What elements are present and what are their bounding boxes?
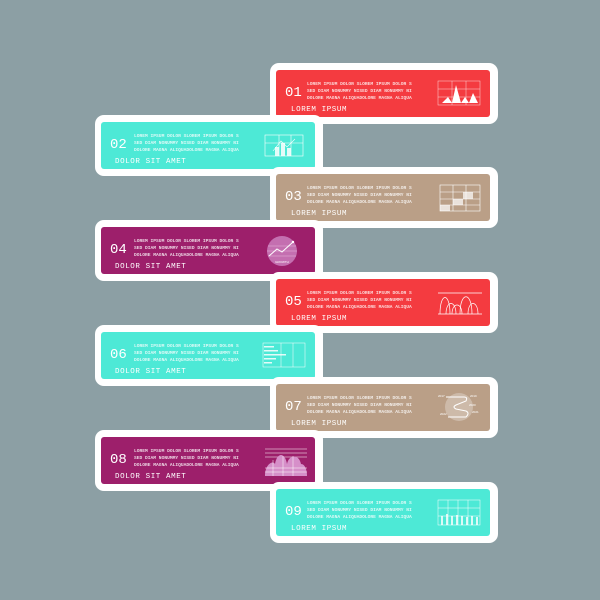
text block 06: DOLORE MAGNA ALIQUADOLORE MAGNA ALIQUA [134,358,239,363]
icon: timeline circle: 2021 [472,410,479,414]
text block 09 [307,501,412,520]
text block 08: DOLORE MAGNA ALIQUADOLORE MAGNA ALIQUA [134,463,239,468]
text block 01 [307,82,412,101]
icon: timeline circle: 2019 [470,394,477,398]
text block 07: DOLORE MAGNA ALIQUADOLORE MAGNA ALIQUA [307,410,412,415]
text block 03: SED DIAM NONUMMY NISED DIAM NONUMMY NI [307,193,412,198]
text block 07: SED DIAM NONUMMY NISED DIAM NONUMMY NI [307,403,412,408]
number 09: 09 [285,504,302,520]
number 02: 02 [110,137,127,153]
icon: timeline circle: 2017 [438,394,445,398]
label 04: DOLOR SIT AMET [115,263,186,271]
text block 08 [134,449,239,468]
text block 02: LOREM IPSUM DOLOR SLOREM IPSUM DOLOR S [134,134,239,139]
number 01: 01 [285,85,302,101]
label 01: LOREM IPSUM [291,106,347,114]
text block 09: SED DIAM NONUMMY NISED DIAM NONUMMY NI [307,508,412,513]
text block 04: LOREM IPSUM DOLOR SLOREM IPSUM DOLOR S [134,239,239,244]
text block 06: SED DIAM NONUMMY NISED DIAM NONUMMY NI [134,351,239,356]
icon: peak chart [438,80,480,106]
card 03 [270,167,498,228]
icon: bar growth chart [264,134,304,156]
text block 02: DOLORE MAGNA ALIQUADOLORE MAGNA ALIQUA [134,148,239,153]
icon: timeline circle: 2022 [440,412,447,416]
number 03: 03 [285,189,302,205]
card 09 [270,482,498,543]
text block 04: SED DIAM NONUMMY NISED DIAM NONUMMY NI [134,246,239,251]
label 08: DOLOR SIT AMET [115,473,186,481]
text block 05: SED DIAM NONUMMY NISED DIAM NONUMMY NI [307,298,412,303]
label 02: DOLOR SIT AMET [115,158,186,166]
text block 07: LOREM IPSUM DOLOR SLOREM IPSUM DOLOR S [307,396,412,401]
card 05 [270,272,498,333]
icon: bell curves [438,292,482,314]
text block 02: SED DIAM NONUMMY NISED DIAM NONUMMY NI [134,141,239,146]
text block 07 [307,396,412,415]
label 05: LOREM IPSUM [291,315,347,323]
label 09: LOREM IPSUM [291,525,347,533]
number 05: 05 [285,294,302,310]
text block 08: LOREM IPSUM DOLOR SLOREM IPSUM DOLOR S [134,449,239,454]
text block 01: DOLORE MAGNA ALIQUADOLORE MAGNA ALIQUA [307,96,412,101]
text block 05: LOREM IPSUM DOLOR SLOREM IPSUM DOLOR S [307,291,412,296]
text block 01: LOREM IPSUM DOLOR SLOREM IPSUM DOLOR S [307,82,412,87]
label 03: LOREM IPSUM [291,210,347,218]
text block 04: DOLORE MAGNA ALIQUADOLORE MAGNA ALIQUA [134,253,239,258]
text block 06 [134,344,239,363]
card 04 [95,220,323,281]
number 07: 07 [285,399,302,415]
text block 06: LOREM IPSUM DOLOR SLOREM IPSUM DOLOR S [134,344,239,349]
icon: column grid chart [438,500,480,526]
text block 04 [134,239,239,258]
text block 03 [307,186,412,205]
text block 08: SED DIAM NONUMMY NISED DIAM NONUMMY NI [134,456,239,461]
text block 09: LOREM IPSUM DOLOR SLOREM IPSUM DOLOR S [307,501,412,506]
icon: growth circle: GROWTH [275,260,289,264]
card 08 [95,430,323,491]
text block 02 [134,134,239,153]
number 06: 06 [110,347,127,363]
label 07: LOREM IPSUM [291,420,347,428]
number 08: 08 [110,452,127,468]
icon: growth circle [267,236,297,266]
text block 09: DOLORE MAGNA ALIQUADOLORE MAGNA ALIQUA [307,515,412,520]
label 06: DOLOR SIT AMET [115,368,186,376]
card 06 [95,325,323,386]
text block 05 [307,291,412,310]
icon: timeline circle [438,393,479,421]
icon: gantt chart [440,184,480,212]
icon: timeline circle: 2020 [469,403,476,407]
text block 01: SED DIAM NONUMMY NISED DIAM NONUMMY NI [307,89,412,94]
number 04: 04 [110,242,127,258]
card 07 [270,377,498,438]
text block 03: LOREM IPSUM DOLOR SLOREM IPSUM DOLOR S [307,186,412,191]
card 01 [270,63,498,124]
icon: horizontal bar chart [262,342,306,368]
icon: hills chart [265,448,307,476]
text block 03: DOLORE MAGNA ALIQUADOLORE MAGNA ALIQUA [307,200,412,205]
text block 05: DOLORE MAGNA ALIQUADOLORE MAGNA ALIQUA [307,305,412,310]
card 02 [95,115,323,176]
